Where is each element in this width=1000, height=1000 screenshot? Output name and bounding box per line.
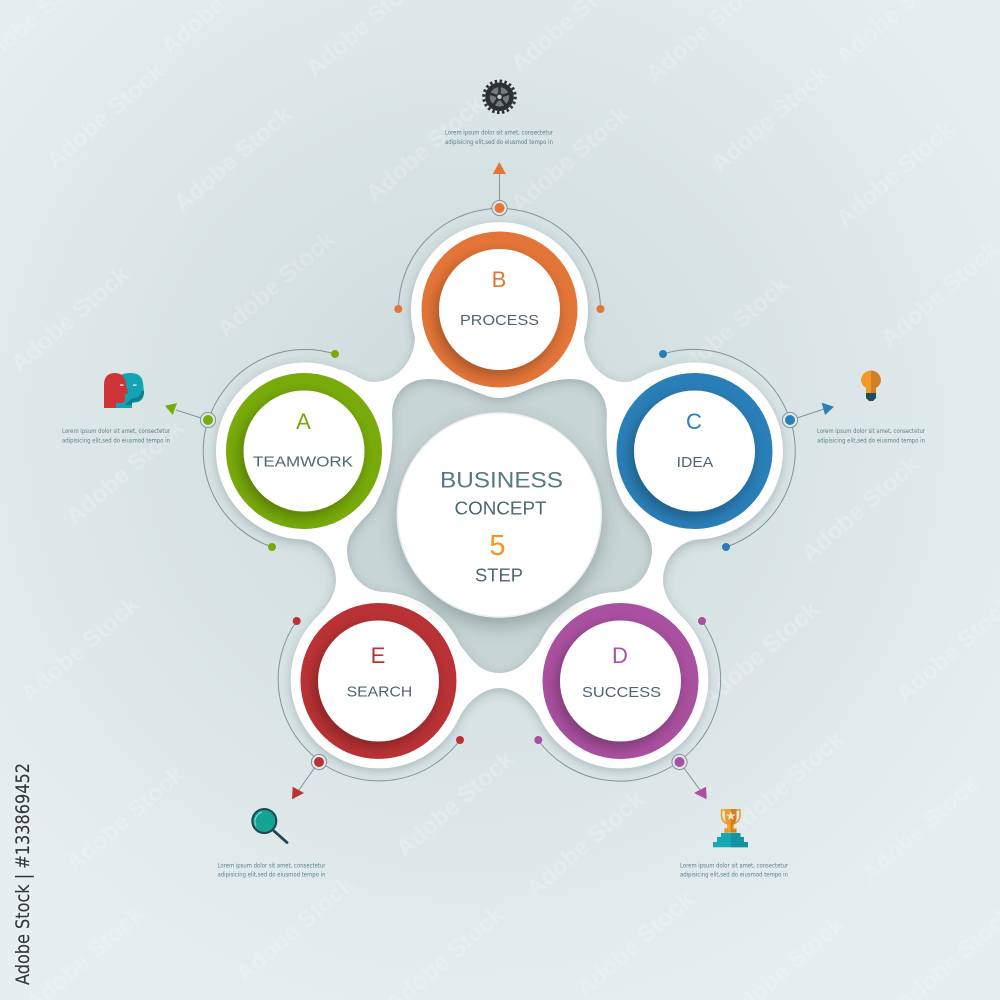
panel: C idea <box>616 373 772 529</box>
text: E description <box>218 864 326 879</box>
icon: magnifier <box>252 809 287 842</box>
stock id side text: Adobe Stock | #133869452 <box>12 763 34 985</box>
label process: PROCESS <box>460 312 539 329</box>
ring A <box>226 373 382 529</box>
text: B description: Lorem ipsum dolor sit amet, consectetur <box>445 130 554 136</box>
connector: C arc and arrow <box>659 349 834 551</box>
stock watermark: Adobe Stock <box>391 746 520 863</box>
stock watermark: Adobe Stock <box>571 886 700 1000</box>
label search: SEARCH <box>347 684 412 701</box>
inner disc C <box>634 390 755 512</box>
inner disc B <box>439 249 560 370</box>
inner disc D <box>560 620 681 742</box>
heading: concept: CONCEPT <box>454 498 546 518</box>
letter E: E <box>371 643 385 668</box>
stock watermark: Adobe Stock <box>212 226 341 343</box>
heading: business: BUSINESS <box>440 468 563 492</box>
connector: E arc and arrow <box>278 617 464 799</box>
text: C description <box>817 429 926 444</box>
icon: two heads <box>104 373 144 408</box>
text: E description: adipisicing elit,sed do eiusmod tempo in <box>218 873 326 879</box>
ring B <box>422 232 578 388</box>
panel: center circle <box>397 413 601 617</box>
stock watermark: Adobe Stock <box>506 101 635 218</box>
label idea: IDEA <box>677 454 713 471</box>
panel: D success <box>542 603 698 759</box>
text: B description <box>445 130 554 146</box>
stock watermark: Adobe Stock <box>706 61 835 178</box>
white connected five-circle panel <box>216 222 783 768</box>
stock watermark: Adobe Stock <box>231 871 360 988</box>
number 5: 5 <box>489 530 506 562</box>
connector: D arc and arrow <box>534 617 721 799</box>
stock watermark: Adobe Stock <box>796 451 925 568</box>
stock watermark: Adobe Stock <box>666 271 795 388</box>
stock watermark: Adobe Stock <box>61 414 190 531</box>
stock watermark: Adobe Stock <box>721 726 850 843</box>
text: D description: adipisicing elit,sed do eiusmod tempo in <box>680 873 788 879</box>
connector: A arc and arrow <box>165 350 339 551</box>
inner disc E <box>318 620 439 742</box>
stock watermark: Adobe Stock <box>169 101 298 218</box>
text: C description: adipisicing elit,sed do eiusmod tempo in <box>817 438 925 444</box>
stock watermark: Adobe Stock <box>831 116 960 233</box>
icon: trophy <box>713 809 748 847</box>
stock watermark: Adobe Stock <box>361 91 490 208</box>
text: C description: Lorem ipsum dolor sit amet, consectetur <box>817 429 926 435</box>
label: step: STEP <box>475 566 523 586</box>
connector: B arc and arrow <box>394 162 604 313</box>
icon: light bulb <box>861 370 881 401</box>
text: A description <box>62 429 171 444</box>
panel: E search <box>300 603 456 759</box>
text: E description: Lorem ipsum dolor sit amet, consectetur <box>218 864 326 870</box>
stock watermark: Adobe Stock <box>16 591 145 708</box>
panel: B process <box>422 232 578 388</box>
stock watermark: Adobe Stock <box>6 261 135 378</box>
ring D <box>542 603 698 759</box>
letter A: A <box>296 409 311 434</box>
label success: SUCCESS <box>582 684 661 701</box>
icon: gear <box>484 81 515 113</box>
inner disc A <box>244 390 364 512</box>
text: A description: Lorem ipsum dolor sit amet, consectetur <box>62 429 171 435</box>
letter B: B <box>492 267 506 292</box>
panel: A teamwork <box>226 373 382 529</box>
text: D description: Lorem ipsum dolor sit amet, consectetur <box>680 864 789 870</box>
text: B description: adipisicing elit,sed do eiusmod tempo in <box>445 140 553 146</box>
label teamwork: TEAMWORK <box>253 454 353 471</box>
stock watermark: Adobe Stock <box>61 761 190 878</box>
letter D: D <box>612 643 628 668</box>
letter C: C <box>686 409 702 434</box>
text: D description <box>680 864 789 879</box>
text: A description: adipisicing elit,sed do eiusmod tempo in <box>62 438 170 444</box>
stock watermark: Adobe Stock <box>521 786 650 903</box>
stock watermark: Adobe Stock <box>696 596 825 713</box>
ring C <box>616 373 772 529</box>
stock watermark: Adobe Stock <box>856 771 985 888</box>
stock watermark: Adobe Stock <box>41 58 170 175</box>
central hole backing <box>347 379 652 673</box>
ring E <box>300 603 456 759</box>
center disc <box>397 413 601 617</box>
